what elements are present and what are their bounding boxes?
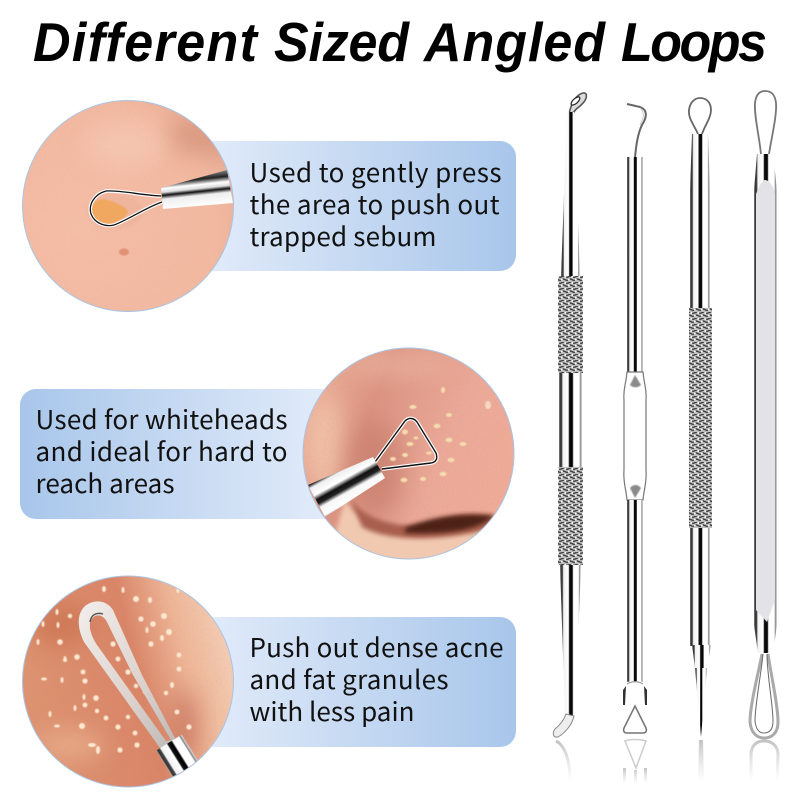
tool 4: double wire loop extractor [750, 91, 778, 782]
panel: whiteheads [20, 389, 350, 519]
text: dense acne description [250, 628, 504, 729]
acne spots [36, 586, 192, 754]
panel: press sebum [180, 141, 516, 271]
icon: triangle loop [375, 418, 437, 469]
title: Loops [621, 12, 767, 73]
text: press sebum description [250, 153, 502, 254]
photo circle: loop pressing pimple on skin [20, 98, 245, 314]
photo circle: long loop on acne skin [20, 574, 236, 790]
photo circle: triangular loop on nose [300, 345, 518, 570]
text: dense acne description: Push out dense acne [250, 628, 504, 665]
title: Different [33, 12, 259, 73]
text: press sebum description: trapped sebum [250, 217, 436, 254]
tool 3: loop and needle extractor [689, 98, 712, 782]
title: Angled [422, 12, 606, 73]
panel: dense acne [180, 617, 516, 747]
text: press sebum description: the area to push out [250, 185, 500, 222]
icon: teardrop loop [90, 191, 162, 226]
icon: tool handle [161, 170, 233, 209]
whitehead spots [390, 387, 491, 482]
text: whiteheads description: and ideal for hard to [36, 432, 288, 469]
text: whiteheads description: Used for whiteheads [36, 400, 288, 437]
title [33, 12, 767, 73]
nostril shadow [334, 502, 483, 558]
icon: tool handle [308, 457, 385, 517]
text: whiteheads description [36, 400, 288, 501]
text: dense acne description: and fat granules [250, 660, 448, 697]
icon: tool handle [156, 734, 198, 776]
icon: long loop [79, 601, 178, 748]
tool 2: hook and triangle extractor [623, 104, 647, 784]
pimple sebum [92, 199, 128, 224]
text: whiteheads description: reach areas [36, 464, 174, 501]
text: dense acne description: with less pain [250, 692, 414, 729]
text: press sebum description: Used to gently press [250, 153, 502, 190]
tool 1: angled spoon extractor [553, 93, 586, 782]
title: Sized [274, 12, 410, 73]
